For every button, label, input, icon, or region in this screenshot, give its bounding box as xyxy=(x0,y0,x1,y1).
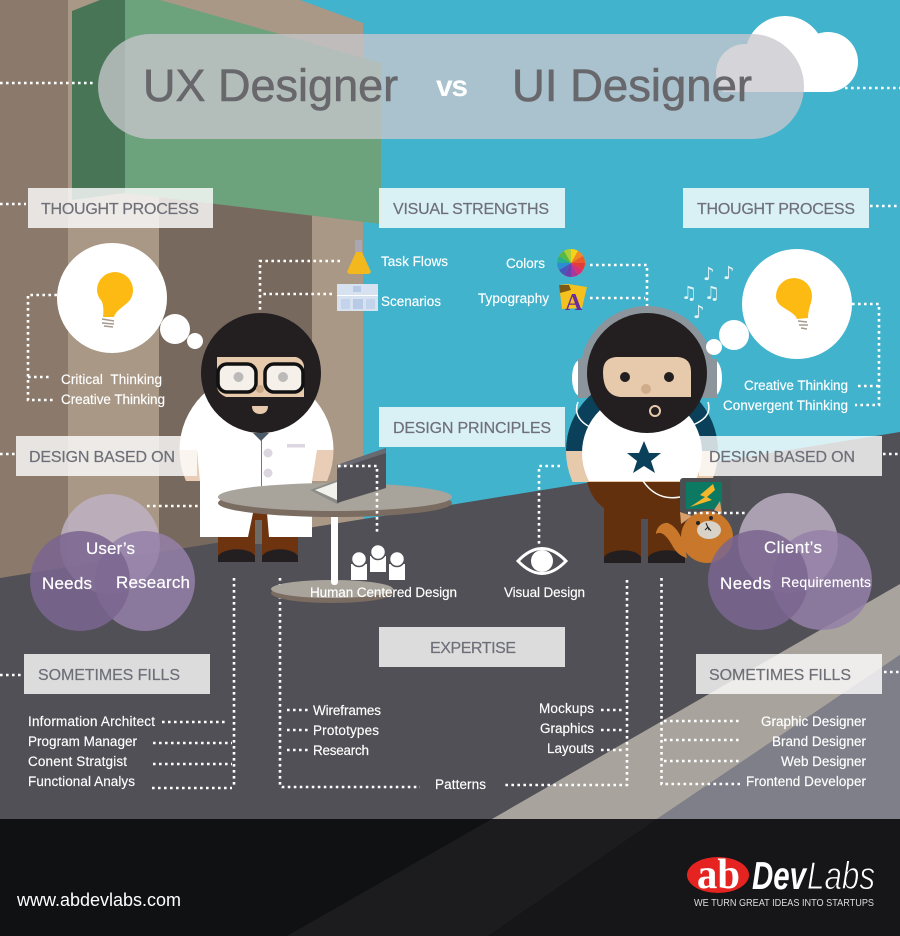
list: UI sometimes fills: Frontend Developer xyxy=(746,774,866,789)
heading: sometimes fills left: SOMETIMES FILLS xyxy=(38,667,180,684)
text: UI visual strengths xyxy=(478,256,549,306)
heading: visual strengths xyxy=(379,188,565,228)
logo: ab xyxy=(697,852,740,898)
icon: music notes: ♪ xyxy=(693,302,704,323)
icon: cat xyxy=(656,501,733,563)
title banner xyxy=(98,34,804,139)
list: UI sometimes fills: Web Designer xyxy=(781,754,866,769)
list: UX sometimes fills: Conent Stratgist xyxy=(28,754,127,769)
icon: task flow flask xyxy=(347,240,371,274)
heading: thought process left xyxy=(28,188,213,228)
text: UI thought process xyxy=(723,378,848,413)
icon: phone with lightning xyxy=(680,478,731,513)
text: UI visual strengths: Colors xyxy=(506,256,545,271)
logo xyxy=(687,852,875,909)
heading: design based on left: DESIGN BASED ON xyxy=(29,449,175,466)
list: UX sometimes fills: Program Manager xyxy=(28,734,138,749)
thought bubble left xyxy=(57,243,203,353)
heading: design principles xyxy=(379,407,565,447)
heading: design principles: DESIGN PRINCIPLES xyxy=(393,420,551,437)
connector: dotted lines xyxy=(0,83,900,788)
UX designer character xyxy=(180,313,334,562)
text: visual design: Visual Design xyxy=(504,585,585,600)
venn diagram left: Needs xyxy=(42,574,92,593)
list: UI sometimes fills: Brand Designer xyxy=(772,734,866,749)
heading: expertise xyxy=(379,627,565,667)
list: UI sometimes fills: Graphic Designer xyxy=(761,714,866,729)
text: human centered design: Human Centered Design xyxy=(310,585,457,600)
icon: typography folder xyxy=(559,284,587,316)
text: patterns: Patterns xyxy=(435,777,486,792)
UI designer character xyxy=(566,306,722,563)
venn diagram left: Research xyxy=(116,573,190,592)
icon: scenarios board xyxy=(337,284,378,311)
heading: thought process right: THOUGHT PROCESS xyxy=(697,201,855,218)
list: UI sometimes fills xyxy=(746,714,866,789)
title banner: vs xyxy=(436,70,468,103)
icon: light bulb xyxy=(776,278,812,329)
heading: sometimes fills right: SOMETIMES FILLS xyxy=(709,667,851,684)
legs and shoes xyxy=(218,513,298,562)
list: UX expertise xyxy=(313,703,381,758)
icon: music notes: ♪ xyxy=(703,264,714,285)
table with laptop xyxy=(218,448,452,603)
venn diagram left: User’s xyxy=(86,539,135,558)
icon: music notes: ♫ xyxy=(681,283,697,304)
heading: expertise: EXPERTISE xyxy=(430,640,516,657)
table top xyxy=(218,483,452,517)
logo: Dev xyxy=(752,855,808,898)
body: coat xyxy=(180,393,334,537)
icon: light bulb xyxy=(97,272,133,327)
text: UX visual strengths xyxy=(381,254,448,309)
title banner: UX Designer xyxy=(143,60,398,111)
logo: Labs xyxy=(807,855,875,898)
heading: thought process left: THOUGHT PROCESS xyxy=(41,201,199,218)
venn diagram right: Requirements xyxy=(781,574,871,590)
heading: sometimes fills left xyxy=(24,654,210,694)
body xyxy=(566,394,718,563)
list: UX expertise: Wireframes xyxy=(313,703,381,718)
text: UX visual strengths: Scenarios xyxy=(381,294,441,309)
logo: WE TURN GREAT IDEAS INTO STARTUPS xyxy=(694,897,874,909)
heading: design based on right: DESIGN BASED ON xyxy=(709,449,855,466)
text: UX visual strengths: Task Flows xyxy=(381,254,448,269)
head xyxy=(201,313,321,433)
icon: color wheel xyxy=(557,249,585,277)
venn diagram right: Client’s xyxy=(764,538,822,557)
venn diagram left xyxy=(30,494,195,631)
list: UX expertise: Prototypes xyxy=(313,723,379,738)
list: UI expertise: Layouts xyxy=(547,741,594,756)
icon: typography folder: A xyxy=(565,290,583,316)
head xyxy=(587,313,707,433)
icon: music notes: ♫ xyxy=(704,283,720,304)
text: UX thought process xyxy=(61,372,165,407)
icon: people group xyxy=(351,544,405,580)
list: UX sometimes fills: Functional Analys xyxy=(28,774,135,789)
venn diagram right xyxy=(708,493,872,630)
list: UX sometimes fills xyxy=(28,714,155,789)
icon: eye xyxy=(518,548,566,574)
laptop xyxy=(310,448,386,504)
text: UI thought process: Creative Thinking xyxy=(744,378,848,393)
table base xyxy=(271,580,393,603)
list: UX sometimes fills: Information Architect xyxy=(28,714,155,729)
icon: music notes xyxy=(681,263,734,323)
list: UX expertise: Research xyxy=(313,743,369,758)
heading: visual strengths: VISUAL STRENGTHS xyxy=(393,201,549,218)
thought bubble right xyxy=(706,249,852,359)
heading: sometimes fills right xyxy=(696,654,882,694)
heading: design based on right xyxy=(699,436,882,476)
icon: cloud xyxy=(716,16,858,92)
venn diagram right: Needs xyxy=(720,574,771,593)
wires xyxy=(577,402,709,427)
text: UX thought process: Critical Thinking xyxy=(61,372,162,387)
text: UI visual strengths: Typography xyxy=(478,291,549,306)
list: UI expertise: Graphics xyxy=(540,721,594,736)
footer url: www.abdevlabs.com xyxy=(16,890,181,910)
icon: music notes: ♪ xyxy=(723,263,734,284)
text: UX thought process: Creative Thinking xyxy=(61,392,165,407)
title banner: UI Designer xyxy=(512,60,752,111)
heading: design based on left xyxy=(16,436,197,476)
list: UI expertise xyxy=(539,701,594,756)
list: UI expertise: Mockups xyxy=(539,701,594,716)
heading: thought process right xyxy=(683,188,869,228)
headphones back xyxy=(572,306,722,398)
text: UI thought process: Convergent Thinking xyxy=(723,398,848,413)
